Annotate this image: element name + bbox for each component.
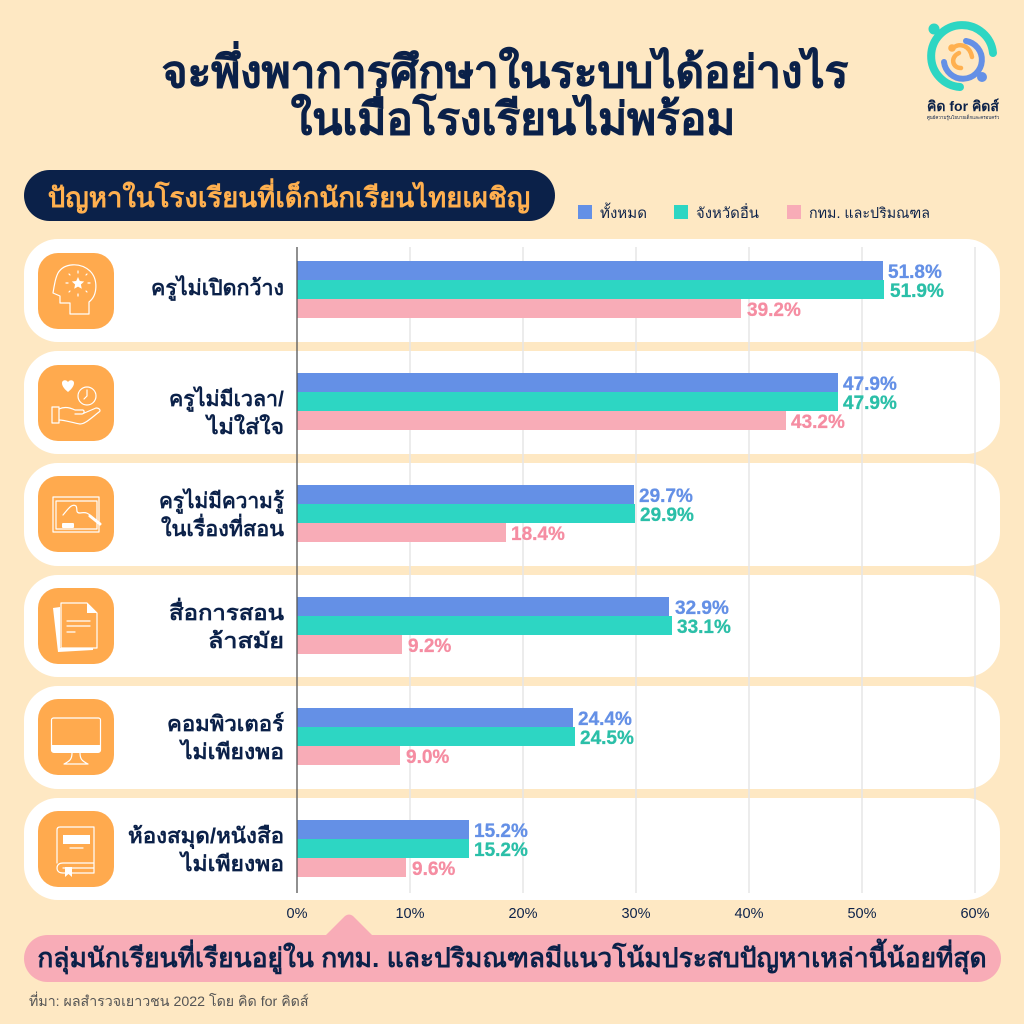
panel: สื่อการสอนล้าสมัย: ล้าสมัย bbox=[208, 629, 284, 653]
bars: 15.2% bbox=[474, 821, 528, 842]
icon: hand with heart and clock bbox=[38, 365, 114, 441]
title: ในเมื่อโรงเรียนไม่พร้อม bbox=[291, 88, 735, 144]
legend: กทม. และปริมณฑล bbox=[809, 206, 930, 222]
bars: 9.2% bbox=[408, 636, 451, 657]
callout: กลุ่มนักเรียนที่เรียนอยู่ใน กทม. และปริมณฑลมีแนวโน้มประสบปัญหาเหล่านี้น้อยที่สุด bbox=[37, 938, 987, 975]
bars: 18.4% bbox=[511, 524, 565, 545]
logo: คิด for คิดส์: ศูนย์ความรู้นโยบายเด็กและครอบครัว bbox=[927, 113, 1000, 121]
section heading pill bbox=[24, 170, 555, 221]
source note: ที่มา: ผลสำรวจเยาวชน 2022 โดย คิด for คิดส์ bbox=[29, 991, 309, 1010]
title: จะพึ่งพาการศึกษาในระบบได้อย่างไร bbox=[162, 41, 849, 97]
bars bbox=[297, 708, 634, 768]
title bbox=[162, 41, 849, 144]
bars: 51.9% bbox=[890, 281, 944, 302]
panel: สื่อการสอนล้าสมัย bbox=[38, 588, 731, 664]
bars: 47.9% bbox=[843, 374, 897, 395]
panel: ห้องสมุด/หนังสือไม่เพียงพอ: ห้องสมุด/หนังสือ bbox=[128, 824, 284, 850]
chart zero axis bbox=[296, 247, 298, 893]
panel: ครูไม่มีความรู้ในเรื่องที่สอน bbox=[38, 476, 694, 552]
legend: จังหวัดอื่น bbox=[696, 203, 759, 222]
bars: 39.2% bbox=[747, 300, 801, 321]
panel: คอมพิวเตอร์ไม่เพียงพอ: คอมพิวเตอร์ bbox=[167, 711, 285, 736]
bars bbox=[297, 261, 944, 321]
x axis labels: 10% bbox=[395, 906, 425, 922]
panel: ครูไม่มีเวลา/ไม่ใส่ใจ: ไม่ใส่ใจ bbox=[205, 413, 284, 439]
panel: ครูไม่มีเวลา/ไม่ใส่ใจ: ครูไม่มีเวลา/ bbox=[169, 386, 284, 413]
bars: 9.6% bbox=[412, 859, 455, 880]
x axis labels: 0% bbox=[287, 906, 308, 922]
panel: ครูไม่มีความรู้ในเรื่องที่สอน: ในเรื่องที่สอน bbox=[161, 513, 284, 541]
callout bbox=[24, 914, 1001, 982]
icon: head with star bbox=[38, 253, 114, 329]
logo: คิด for คิดส์: คิด for คิดส์ bbox=[927, 98, 999, 114]
icon: book bbox=[38, 811, 114, 887]
icon: document bbox=[38, 588, 114, 664]
bars bbox=[297, 820, 528, 880]
panel backgrounds bbox=[24, 239, 1000, 900]
bars: 15.2% bbox=[474, 840, 528, 861]
x axis labels: 40% bbox=[734, 906, 764, 922]
bars: 51.8% bbox=[888, 262, 942, 283]
bars: 29.9% bbox=[640, 505, 694, 526]
x axis labels bbox=[287, 906, 990, 922]
bars: 33.1% bbox=[677, 617, 731, 638]
bars bbox=[297, 597, 731, 657]
panel: ครูไม่เปิดกว้าง: ครูไม่เปิดกว้าง bbox=[151, 275, 284, 302]
bars: 43.2% bbox=[791, 412, 845, 433]
x axis labels: 50% bbox=[847, 906, 877, 922]
bars bbox=[297, 373, 897, 433]
panel: ครูไม่มีเวลา/ไม่ใส่ใจ bbox=[38, 365, 897, 441]
icon: computer monitor bbox=[38, 699, 114, 775]
chart grid lines bbox=[410, 247, 975, 893]
bars bbox=[297, 485, 694, 545]
bars: 47.9% bbox=[843, 393, 897, 414]
bars: 32.9% bbox=[675, 598, 729, 619]
panel: ห้องสมุด/หนังสือไม่เพียงพอ: ไม่เพียงพอ bbox=[179, 851, 284, 876]
bars: 29.7% bbox=[639, 486, 693, 507]
icon: blackboard bbox=[38, 476, 114, 552]
section heading pill: ปัญหาในโรงเรียนที่เด็กนักเรียนไทยเผชิญ bbox=[48, 178, 530, 214]
panel: ห้องสมุด/หนังสือไม่เพียงพอ bbox=[38, 811, 528, 887]
legend bbox=[578, 202, 930, 222]
x axis labels: 30% bbox=[621, 906, 651, 922]
bars: 9.0% bbox=[406, 747, 449, 768]
panel: คอมพิวเตอร์ไม่เพียงพอ: ไม่เพียงพอ bbox=[179, 739, 284, 764]
legend: ทั้งหมด bbox=[600, 202, 647, 222]
panel: สื่อการสอนล้าสมัย: สื่อการสอน bbox=[169, 597, 284, 625]
bars: 24.5% bbox=[580, 728, 634, 749]
panel: ครูไม่เปิดกว้าง bbox=[38, 253, 944, 329]
panel: ครูไม่มีความรู้ในเรื่องที่สอน: ครูไม่มีความรู้ bbox=[159, 488, 284, 515]
logo: คิด for คิดส์ bbox=[927, 24, 1000, 121]
x axis labels: 20% bbox=[508, 906, 538, 922]
x axis labels: 60% bbox=[960, 906, 990, 922]
panel: คอมพิวเตอร์ไม่เพียงพอ bbox=[38, 699, 634, 775]
bars: 24.4% bbox=[578, 709, 632, 730]
